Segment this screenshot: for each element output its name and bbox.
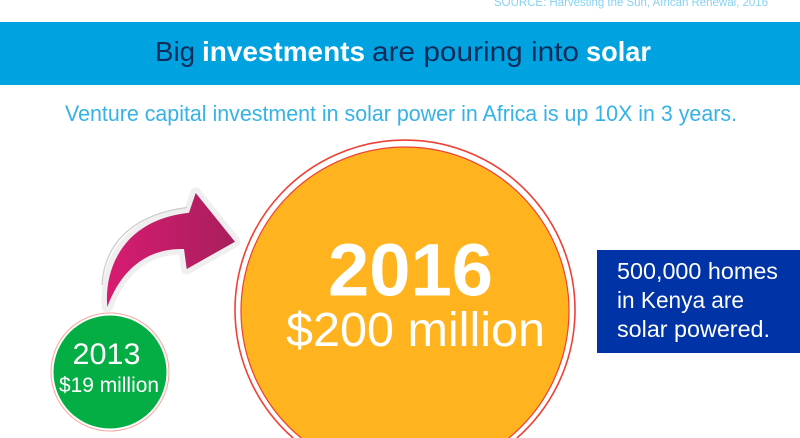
circle: 2013 (51, 313, 169, 431)
callout: Kenya homes: in Kenya are (617, 287, 744, 313)
amount $200 million: $200 million (286, 304, 545, 357)
year 2016: 2016 (328, 228, 493, 312)
banner heading: are pouring into (372, 36, 579, 67)
subtitle: Venture capital investment in solar power in Africa is up 10X in 3 years. (65, 101, 737, 126)
banner heading: solar (586, 36, 651, 67)
circle: 2016 (235, 140, 575, 438)
header banner (0, 22, 800, 85)
callout: Kenya homes: solar powered. (617, 316, 770, 342)
callout: Kenya homes: 500,000 homes (617, 258, 778, 284)
amount $19 million: $19 million (59, 374, 159, 397)
banner heading: investments (202, 36, 365, 67)
year 2013: 2013 (72, 338, 140, 371)
banner heading: Big (155, 36, 195, 67)
callout: Kenya homes (597, 250, 800, 353)
icon: curved arrow (102, 193, 235, 307)
banner heading (155, 36, 651, 67)
